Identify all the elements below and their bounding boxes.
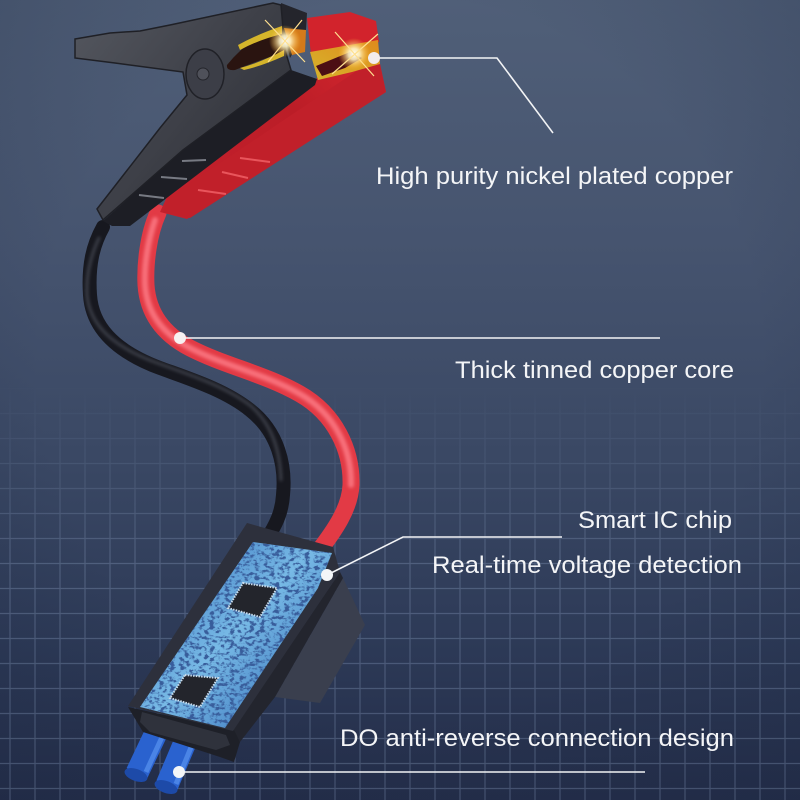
label: smart IC chip: Smart IC chip	[578, 507, 732, 534]
leader: copper core	[174, 332, 660, 344]
label: anti-reverse design: DO anti-reverse connection design	[340, 725, 734, 752]
circuit board window	[140, 542, 332, 728]
leader: IC chip	[321, 537, 562, 581]
control box front	[128, 523, 340, 762]
sparks on clamp contacts	[265, 20, 378, 76]
red cable	[145, 213, 351, 552]
label: voltage detection: Real-time voltage detection	[432, 552, 742, 579]
clamp pivot rivet	[186, 49, 224, 99]
chip upper	[228, 583, 277, 617]
black clamp	[75, 3, 317, 226]
leader: nickel plated copper	[368, 52, 553, 133]
label: nickel plated copper: High purity nickel plated copper	[376, 163, 733, 190]
red clamp	[160, 12, 386, 219]
control box side housing	[233, 572, 365, 742]
label: copper core: Thick tinned copper core	[455, 357, 734, 384]
leader: connector	[173, 766, 645, 778]
black cable	[87, 227, 284, 540]
chip lower	[170, 675, 218, 707]
EC5 blue connectors	[123, 731, 192, 797]
